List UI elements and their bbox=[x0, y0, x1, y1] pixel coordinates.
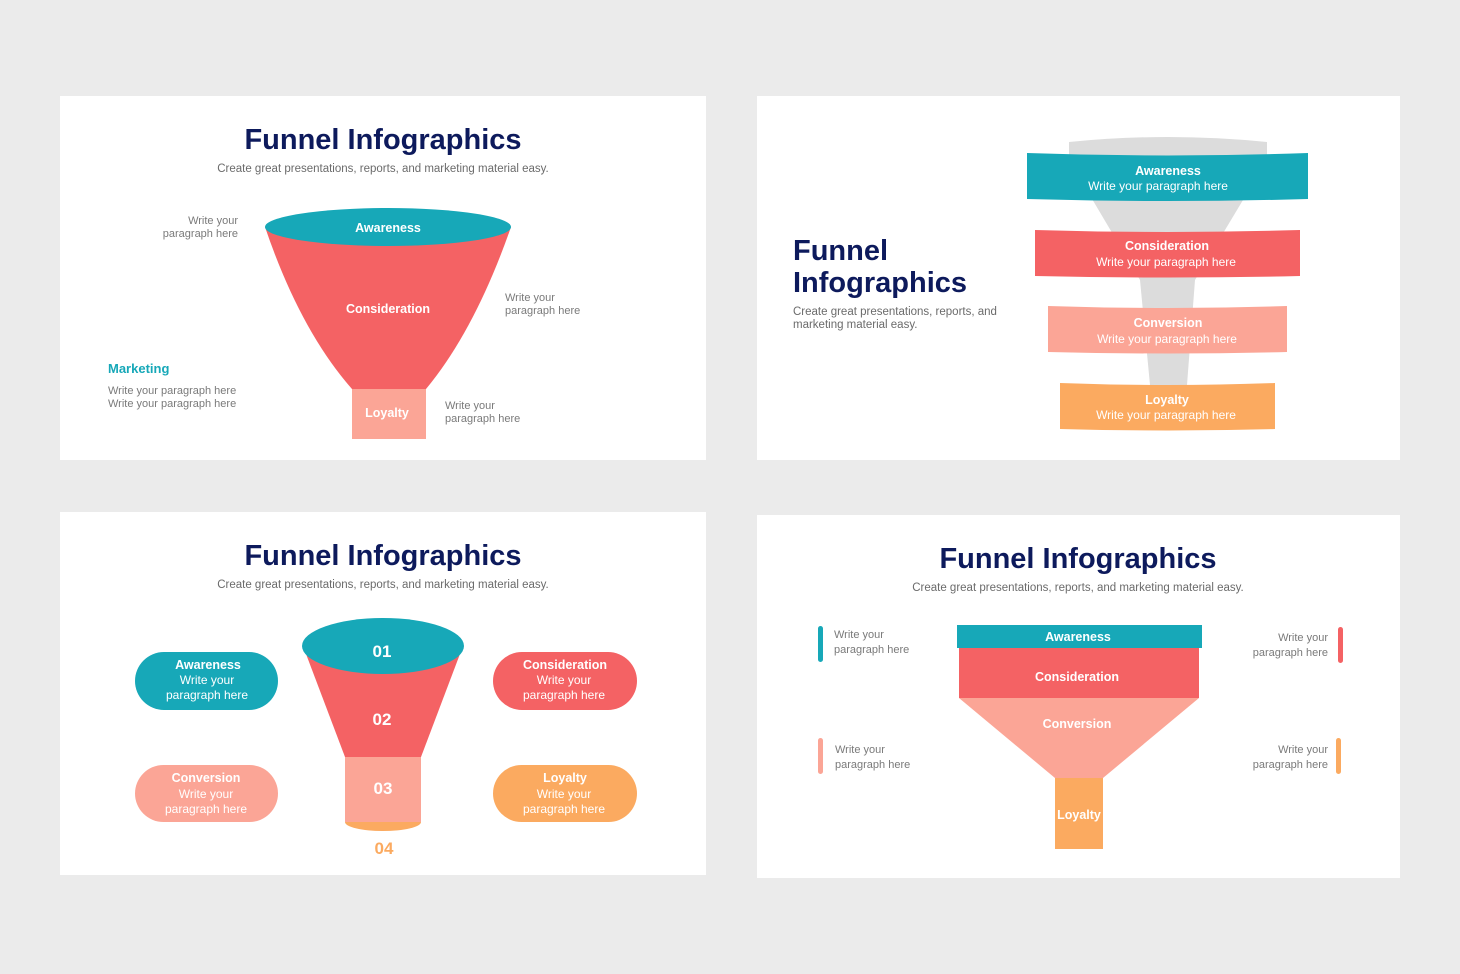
panel: funnel 1: Loyalty bbox=[365, 406, 409, 420]
panel: funnel 1: Consideration bbox=[346, 302, 430, 316]
panel: funnel 4: Awareness bbox=[1045, 630, 1111, 644]
panel: funnel 1: Awareness bbox=[355, 221, 421, 235]
pill: conversion bbox=[135, 765, 278, 822]
note: top right: paragraph here bbox=[1253, 647, 1328, 659]
funnel salmon part bbox=[345, 757, 421, 822]
gray funnel bbox=[1069, 137, 1267, 385]
note: top right bbox=[1253, 627, 1343, 663]
text: loyalty note: Write your bbox=[445, 400, 495, 412]
band: conversion bbox=[1048, 306, 1287, 354]
title: Funnel Infographics bbox=[244, 540, 522, 572]
awareness bar bbox=[957, 625, 1202, 648]
pill: consideration bbox=[493, 652, 637, 710]
funnel top: awareness bbox=[265, 208, 511, 246]
pill: conversion: Write your bbox=[179, 787, 233, 801]
note: bottom left: paragraph here bbox=[835, 759, 910, 771]
pill: consideration: Write your bbox=[537, 673, 591, 687]
panel: funnel 1: Write your paragraph here bbox=[108, 398, 236, 410]
panel: funnel 2: marketing material easy. bbox=[793, 319, 917, 331]
panel: funnel 2: Loyalty bbox=[1145, 393, 1189, 407]
loyalty stem bbox=[1055, 778, 1103, 849]
panel: funnel 2: Write your paragraph here bbox=[1096, 255, 1236, 269]
pill: awareness: paragraph here bbox=[166, 688, 248, 702]
pill: loyalty bbox=[493, 765, 637, 822]
text: left note: Write your bbox=[188, 215, 238, 227]
pill: consideration: Consideration bbox=[523, 658, 607, 672]
subtitle: Create great presentations, reports, and bbox=[793, 306, 997, 318]
note: top left: Write your bbox=[834, 629, 884, 641]
pill: loyalty: paragraph here bbox=[523, 802, 605, 816]
pill: conversion: Conversion bbox=[172, 771, 240, 785]
pill: awareness bbox=[135, 652, 278, 710]
consideration bar bbox=[959, 648, 1199, 698]
panel: funnel 2: Consideration bbox=[1125, 239, 1209, 253]
band: consideration bbox=[1035, 230, 1300, 278]
panel: funnel 2 bbox=[757, 96, 1400, 460]
pill: consideration: paragraph here bbox=[523, 688, 605, 702]
title: Funnel Infographics bbox=[244, 124, 522, 156]
panel: funnel 3: 04 bbox=[375, 839, 394, 858]
panel: funnel 1: Write your paragraph here bbox=[108, 385, 236, 397]
title: Funnel bbox=[793, 235, 888, 267]
panel: funnel 3: 01 bbox=[373, 642, 391, 661]
note: top left: paragraph here bbox=[834, 644, 909, 656]
pill: loyalty: Loyalty bbox=[543, 771, 587, 785]
panel: funnel 4 bbox=[757, 515, 1400, 878]
panel: funnel 1: paragraph here bbox=[163, 228, 238, 240]
panel: funnel 4: Conversion bbox=[1043, 717, 1111, 731]
loyalty block bbox=[352, 389, 426, 439]
pill: loyalty: Write your bbox=[537, 787, 591, 801]
pill: awareness: Write your bbox=[180, 673, 234, 687]
pill: awareness: Awareness bbox=[175, 658, 241, 672]
band: loyalty bbox=[1060, 383, 1275, 430]
funnel bottom orange bbox=[345, 813, 421, 831]
funnel red part bbox=[303, 646, 463, 757]
title: Funnel Infographics bbox=[939, 543, 1217, 575]
panel: funnel 3 bbox=[60, 512, 706, 875]
panel: funnel 2: Awareness bbox=[1135, 164, 1201, 178]
conversion trapezoid bbox=[959, 698, 1199, 778]
band: awareness bbox=[1027, 153, 1308, 201]
note: bottom right: Write your bbox=[1278, 744, 1328, 756]
panel: funnel 2: Write your paragraph here bbox=[1097, 332, 1237, 346]
note: bottom left: Write your bbox=[835, 744, 885, 756]
note: top left bbox=[818, 626, 909, 662]
note: bottom right: paragraph here bbox=[1253, 759, 1328, 771]
panel: funnel 1 bbox=[60, 96, 706, 460]
text: right note: Write your bbox=[505, 292, 555, 304]
panel: funnel 4: Loyalty bbox=[1057, 808, 1101, 822]
subtitle: Create great presentations, reports, and marketing material easy. bbox=[217, 579, 549, 591]
pill: conversion: paragraph here bbox=[165, 802, 247, 816]
panel: funnel 2: Write your paragraph here bbox=[1096, 408, 1236, 422]
note: top right: Write your bbox=[1278, 632, 1328, 644]
panel: funnel 4: Consideration bbox=[1035, 670, 1119, 684]
panel: funnel 1: paragraph here bbox=[505, 305, 580, 317]
panel: funnel 1: paragraph here bbox=[445, 413, 520, 425]
note: bottom left bbox=[818, 738, 910, 774]
subtitle: Create great presentations, reports, and marketing material easy. bbox=[217, 163, 549, 175]
funnel body bbox=[265, 227, 511, 389]
panel: funnel 3: 02 bbox=[373, 710, 391, 729]
funnel top ellipse bbox=[302, 618, 464, 674]
panel: funnel 2: Conversion bbox=[1134, 316, 1202, 330]
panel: funnel 2: Write your paragraph here bbox=[1088, 179, 1228, 193]
note: bottom right bbox=[1253, 738, 1341, 774]
subtitle: Create great presentations, reports, and marketing material easy. bbox=[912, 582, 1244, 594]
panel: funnel 3: 03 bbox=[374, 779, 392, 798]
marketing block: Marketing bbox=[108, 361, 169, 376]
panel: funnel 2: Infographics bbox=[793, 267, 967, 299]
